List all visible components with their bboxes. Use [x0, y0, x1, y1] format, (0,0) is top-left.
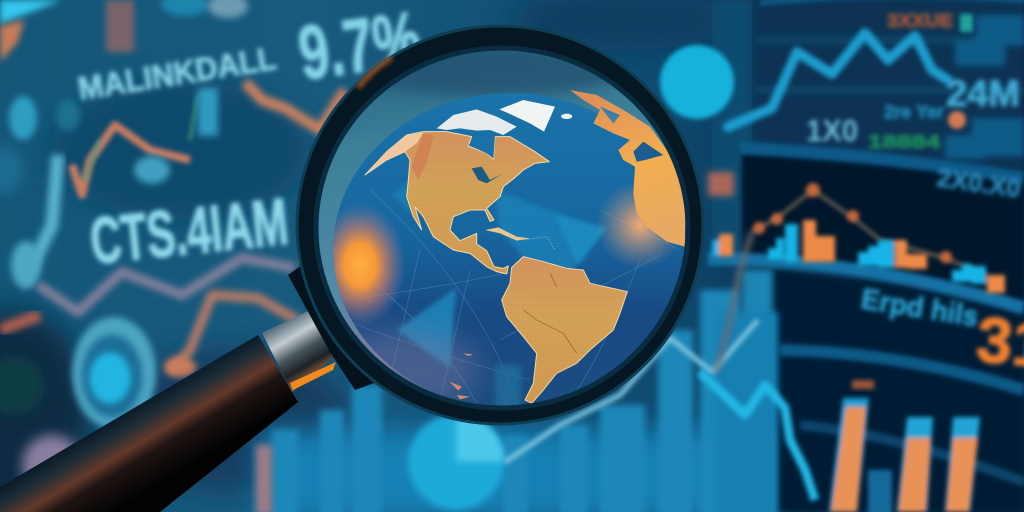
sparkline with dots — [752, 190, 985, 275]
orange rim glint — [358, 58, 392, 88]
top lens reflection — [388, 50, 610, 99]
top right panel — [750, 0, 1024, 170]
Great Lakes — [472, 167, 503, 183]
dark middle panel — [742, 150, 1024, 305]
panel: right dashboard — [505, 0, 1024, 512]
cyan corner band — [0, 0, 62, 24]
small southern islands — [449, 353, 473, 399]
orange lens glow — [333, 205, 404, 324]
bracket — [288, 265, 382, 390]
green square — [960, 14, 973, 32]
orange upper line — [245, 82, 345, 130]
top blobs — [161, 0, 209, 16]
mauve wave line — [38, 258, 295, 312]
Canadian arctic islands — [437, 109, 517, 135]
lens glass — [318, 50, 686, 406]
orange rim reflection right — [677, 176, 680, 186]
left triangle near coast — [394, 183, 410, 212]
target dial — [72, 317, 156, 429]
small blue blob — [134, 156, 170, 184]
heading text: MALINKDALL: MALINKDALL — [75, 40, 279, 107]
Greenland — [499, 100, 555, 132]
cyan circle — [660, 45, 734, 119]
Europe and Africa — [570, 90, 685, 247]
orange column bars — [829, 398, 980, 512]
pale line over bars — [505, 320, 758, 462]
blue line chart — [728, 33, 948, 127]
globe — [314, 90, 690, 410]
Rocky mountain shading — [412, 133, 433, 180]
North America texture — [413, 160, 503, 233]
Cuba — [485, 227, 530, 241]
tall overlap bars — [742, 270, 772, 512]
North America — [365, 132, 549, 274]
Hudson Bay — [468, 137, 495, 158]
ferrule — [262, 311, 340, 392]
pale triangle lower left — [397, 288, 456, 368]
South America texture — [507, 273, 620, 383]
orange corner blob — [0, 20, 24, 62]
handle — [0, 335, 298, 512]
reddish vertical bar — [106, 0, 134, 52]
Mediterranean — [633, 142, 663, 162]
Iceland — [561, 114, 572, 119]
mauve circle — [22, 435, 82, 495]
ferrule orange reflection — [290, 362, 336, 390]
red lower-left line — [0, 315, 40, 330]
blue vertical bar — [198, 88, 218, 136]
blue rising line — [30, 155, 58, 270]
text: Erpd hils: Erpd hils — [859, 283, 980, 333]
Caribbean islands — [523, 237, 555, 250]
dark lower panel — [775, 270, 1024, 512]
text: 2X0.X0: 2X0.X0 — [935, 162, 1023, 204]
orange blob — [164, 357, 196, 377]
side swatches — [708, 172, 734, 196]
cyan wiggle line — [700, 372, 815, 500]
text: 24M: 24M — [946, 73, 1020, 114]
left column strip — [712, 0, 752, 260]
mini bars — [712, 220, 1005, 293]
South America borders — [523, 273, 577, 353]
panel bands — [708, 0, 1024, 482]
orange square — [948, 111, 966, 129]
panel: left blurred charts — [0, 0, 426, 495]
pale block bottom — [495, 365, 521, 410]
dark left dial — [0, 355, 45, 415]
green line segment — [84, 95, 198, 182]
text: orange label: 3XXUE — [887, 11, 953, 31]
bottom rose haze — [356, 319, 488, 402]
pale triangle upper — [496, 192, 578, 268]
text: green label: 18884 — [868, 132, 940, 152]
Baltic — [600, 107, 620, 123]
right lens glow — [598, 184, 677, 267]
small text blocks — [945, 15, 1024, 159]
orange edge sliver — [297, 240, 304, 264]
text: small blue label: 2re Yer — [884, 102, 944, 122]
pale triangle right — [558, 216, 604, 266]
pie chart — [408, 414, 504, 510]
orange lower line — [170, 295, 300, 372]
grid lines — [340, 190, 680, 410]
Alaska pale edge — [365, 133, 423, 175]
text: 1X0: 1X0 — [806, 113, 858, 148]
inner rim — [316, 48, 688, 408]
panel: bottom bars — [256, 290, 740, 512]
outer rim — [296, 25, 704, 425]
reddish bar — [256, 445, 272, 512]
continents (zoom coordinates) — [365, 90, 685, 403]
orange line chart — [72, 125, 190, 195]
South America — [502, 257, 627, 403]
figure text: CTS.4IAM: CTS.4IAM — [87, 184, 291, 278]
magnifying glass — [0, 25, 704, 512]
bar caption — [852, 380, 874, 389]
dots — [9, 96, 37, 140]
rising brown line — [716, 232, 752, 372]
